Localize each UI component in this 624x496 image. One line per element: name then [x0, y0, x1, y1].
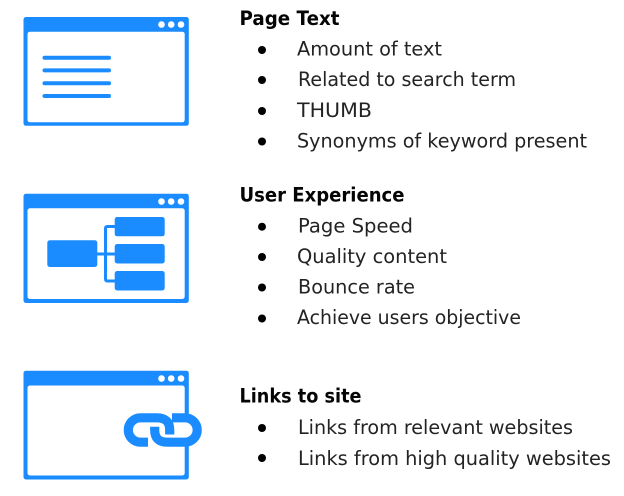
list: User Experience items: Bounce rate: [298, 276, 415, 298]
list: User Experience items: Quality content: [297, 245, 447, 268]
heading: User Experience: User Experience: [240, 184, 404, 207]
icon: browser window with chain link: [24, 371, 197, 480]
list: Page Text items: THUMB: [296, 99, 372, 122]
heading: Page Text: Page Text: [240, 7, 340, 30]
section: Page Text: [240, 7, 587, 152]
list: Links to site items: Links from relevant websites: [298, 416, 573, 439]
heading: Links to site: Links to site: [240, 384, 362, 408]
list: Links to site items: [258, 416, 611, 470]
section: User Experience: [240, 184, 521, 329]
list: Links to site items: Links from high quality websites: [298, 447, 611, 470]
list: User Experience items: [258, 214, 521, 329]
list: Page Text items: Amount of text: [297, 38, 442, 60]
icon: browser window with hierarchy diagram: [24, 194, 189, 303]
list: Page Text items: Related to search term: [298, 68, 516, 91]
list: Page Text items: [258, 38, 587, 152]
list: Page Text items: Synonyms of keyword present: [297, 130, 587, 152]
list: User Experience items: Achieve users objective: [297, 306, 521, 329]
icon: browser window with text lines: [24, 17, 189, 126]
list: User Experience items: Page Speed: [298, 214, 413, 238]
section: Links to site: [240, 384, 611, 470]
